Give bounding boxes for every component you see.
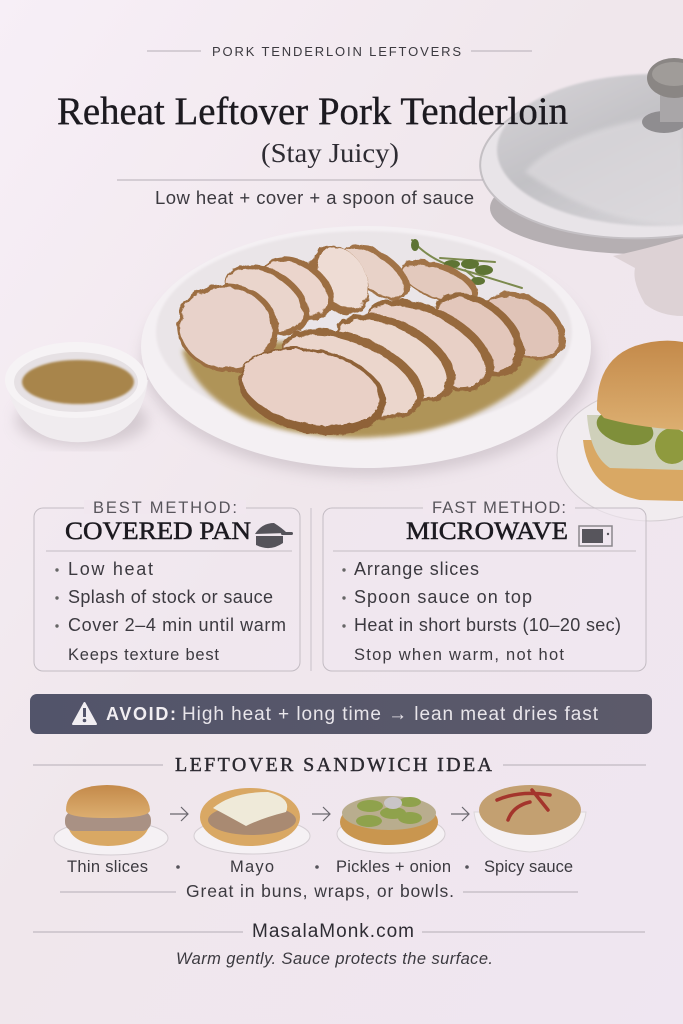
- panel label: FAST METHOD:: [432, 499, 566, 517]
- list: Cover 2–4 min until warm: [68, 615, 286, 635]
- front row slices: [230, 276, 540, 448]
- panel label: BEST METHOD:: [93, 499, 237, 517]
- list: [342, 559, 621, 664]
- panel: covered pan: [34, 499, 300, 671]
- garnish: thyme: [411, 239, 522, 288]
- panel: microwave: [323, 499, 646, 671]
- step: spicy sauce bowl: [474, 785, 586, 852]
- tagline: Low heat + cover + a spoon of sauce: [155, 187, 474, 208]
- sauce pool: [182, 340, 552, 438]
- subtitle: (Stay Juicy): [261, 138, 399, 168]
- arrow: [312, 807, 330, 821]
- callout: avoid bar: [30, 694, 652, 734]
- step labels: Spicy sauce: [484, 858, 573, 876]
- step labels: [67, 858, 573, 876]
- image: plate of sliced pork: [141, 226, 594, 476]
- icon: warning triangle: [73, 703, 96, 724]
- back row slices: [171, 233, 579, 379]
- step: thin slices burger: [54, 785, 168, 855]
- image: towel: [613, 238, 683, 316]
- brand: masalamonk: MasalaMonk.com: [252, 921, 414, 942]
- title: Reheat Leftover Pork Tenderloin: [57, 90, 568, 133]
- heading: leftover sandwich idea: LEFTOVER SANDWICH IDEA: [175, 754, 493, 776]
- list: Keeps texture best: [68, 646, 219, 664]
- callout: avoid bar: AVOID:: [106, 704, 176, 724]
- callout: avoid bar: High heat + long time → lean meat dries fast: [182, 704, 599, 725]
- closing line: Warm gently. Sauce protects the surface.: [176, 950, 493, 968]
- icon: pan: [255, 523, 293, 548]
- arrow: [451, 807, 469, 821]
- note: serving idea: Great in buns, wraps, or bowls.: [186, 881, 454, 901]
- step labels: Mayo: [230, 858, 274, 876]
- list: [55, 559, 286, 664]
- image: lid and pan: [476, 58, 683, 254]
- list: Heat in short bursts (10–20 sec): [354, 615, 621, 635]
- step: pickles and onion: [337, 796, 445, 853]
- image: sauce bowl: [5, 342, 148, 446]
- step labels: Pickles + onion: [336, 858, 451, 876]
- icon: microwave: [579, 526, 612, 546]
- list: Arrange slices: [354, 559, 479, 579]
- step: mayo: [194, 788, 310, 854]
- image: burger on plate: [557, 341, 683, 521]
- list: Spoon sauce on top: [354, 587, 532, 607]
- list: Splash of stock or sauce: [68, 587, 273, 607]
- panel heading: COVERED PAN: [65, 518, 251, 545]
- eyebrow: pork tenderloin leftovers: PORK TENDERLOIN LEFTOVERS: [212, 44, 461, 59]
- arrow: [170, 807, 188, 821]
- panel heading: MICROWAVE: [406, 518, 568, 545]
- step labels: Thin slices: [67, 858, 148, 876]
- list: Low heat: [68, 559, 153, 579]
- list: Stop when warm, not hot: [354, 646, 564, 664]
